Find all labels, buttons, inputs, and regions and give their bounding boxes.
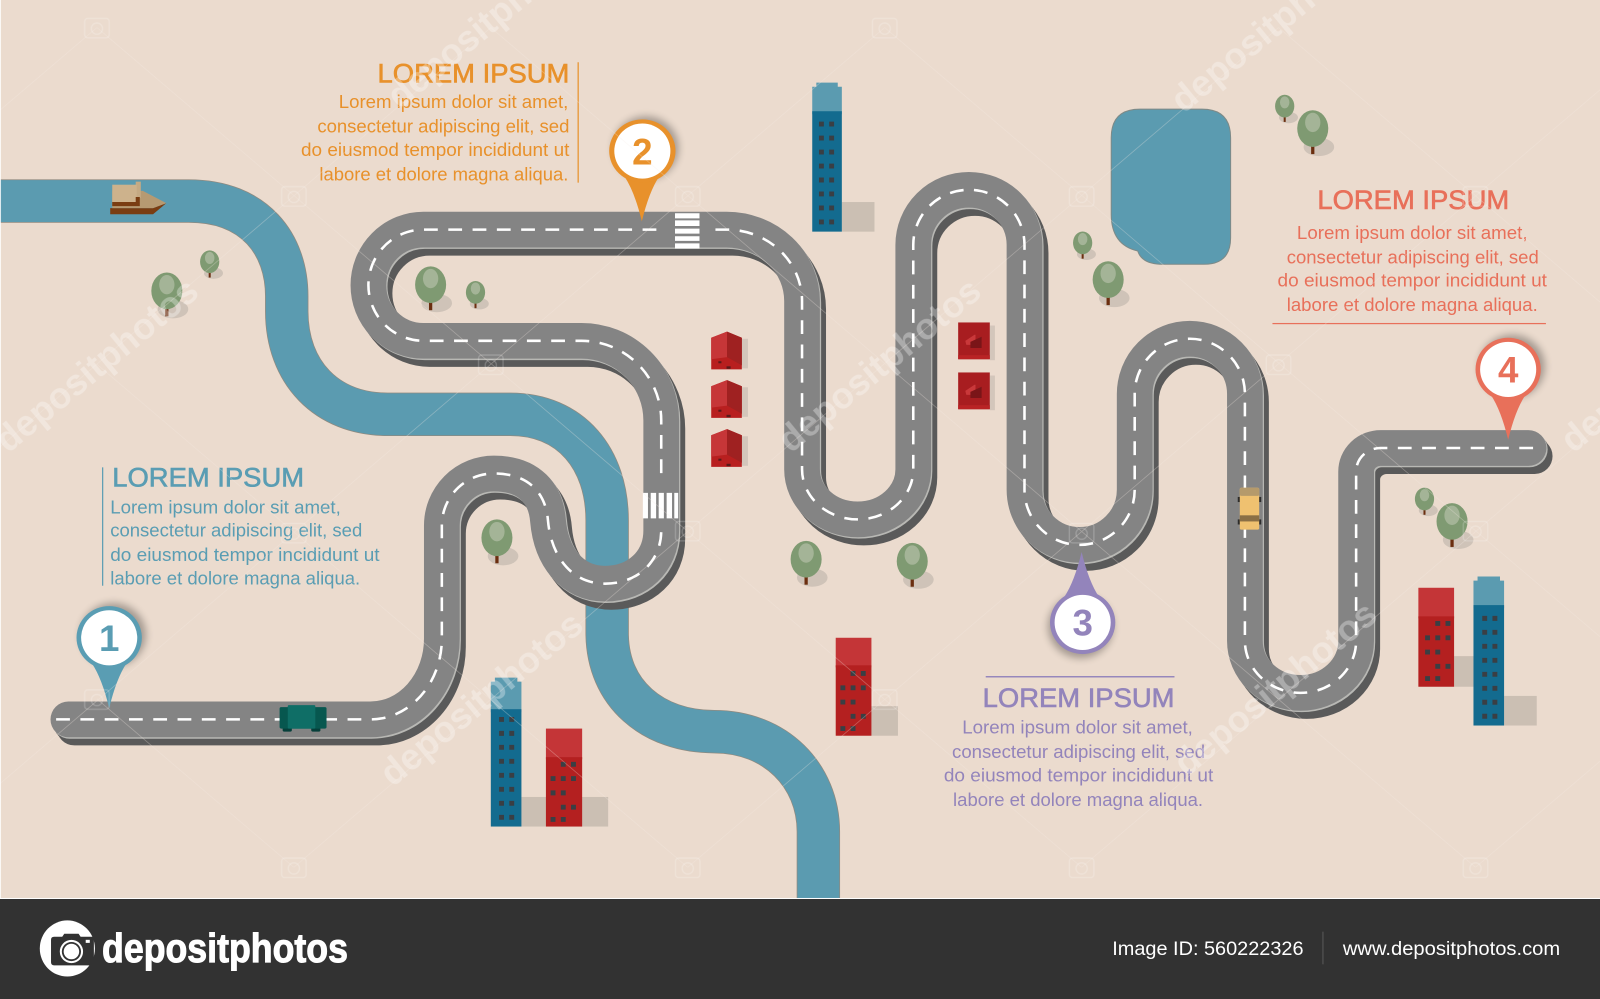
body 4 — [1278, 222, 1548, 315]
road — [56, 190, 1541, 728]
heading 4: LOREM IPSUM — [1317, 185, 1509, 215]
watermark overlay: depositphotos — [770, 270, 989, 460]
body 3 — [944, 717, 1214, 810]
pin 2 — [609, 116, 679, 221]
tree 10 — [1073, 231, 1096, 260]
body 4: labore et dolore magna aliqua. — [1287, 294, 1538, 315]
watermark overlay: depositphotos — [1166, 593, 1385, 784]
tree 11 — [1093, 261, 1130, 307]
tree 5 — [481, 519, 518, 565]
footer logo text: depositphotos — [102, 925, 348, 971]
footer logo icon — [40, 920, 95, 977]
pin 2: 2 — [632, 131, 653, 172]
body 4: consectetur adipiscing elit, sed — [1287, 246, 1539, 267]
flat house 2 — [958, 372, 995, 410]
tree 8 — [1275, 95, 1298, 123]
body 1: Lorem ipsum dolor sit amet, — [110, 496, 341, 517]
pin 1: 1 — [99, 618, 119, 659]
website url: www.depositphotos.com — [1342, 938, 1560, 960]
text block 4: coral — [1272, 185, 1548, 324]
body 2 — [301, 91, 570, 185]
tree 12 — [1415, 488, 1438, 516]
river — [0, 201, 818, 903]
towers: lower pair — [491, 678, 608, 827]
body 4: do eiusmod tempor incididunt ut — [1278, 270, 1548, 291]
text block 2: orange — [301, 59, 579, 185]
tree 9 — [1297, 110, 1334, 156]
body 2: labore et dolore magna aliqua. — [319, 164, 568, 185]
car: green — [280, 705, 327, 732]
house 1 — [711, 332, 748, 369]
pin 4 — [1476, 335, 1545, 440]
pin 4: 4 — [1498, 350, 1519, 391]
tree 4 — [466, 281, 489, 309]
tree 6 — [791, 541, 828, 587]
body 3: Lorem ipsum dolor sit amet, — [962, 717, 1193, 738]
body 1: labore et dolore magna aliqua. — [110, 568, 360, 589]
body 2: Lorem ipsum dolor sit amet, — [339, 91, 568, 112]
heading 1: LOREM IPSUM — [112, 463, 304, 493]
pin 1 — [77, 603, 146, 708]
tree 1 — [151, 272, 188, 318]
body 2: do eiusmod tempor incididunt ut — [301, 139, 570, 160]
car: yellow taxi — [1238, 488, 1261, 530]
houses: red row — [711, 332, 748, 467]
text block 3: purple — [944, 676, 1214, 810]
towers: right pair — [1418, 577, 1537, 726]
tree 13 — [1437, 503, 1473, 549]
crosswalk: lower road — [643, 480, 678, 529]
body 1 — [110, 496, 380, 589]
boat — [110, 182, 166, 214]
tower: red middle — [836, 638, 898, 736]
houses: flat pair — [958, 322, 995, 410]
left edge — [0, 0, 1, 898]
text block 1: teal — [102, 463, 380, 589]
watermark overlay: depositphotos — [372, 603, 591, 794]
body 3: labore et dolore magna aliqua. — [953, 789, 1203, 810]
house 3 — [711, 429, 748, 467]
road shadow — [71, 194, 1535, 728]
body 1: consectetur adipiscing elit, sed — [110, 520, 362, 541]
heading 2: LOREM IPSUM — [378, 59, 569, 89]
footer bar — [0, 898, 1600, 999]
tree 2 — [200, 250, 223, 279]
tree 3 — [415, 266, 452, 312]
flat house 1 — [958, 322, 995, 360]
heading 3: LOREM IPSUM — [983, 683, 1174, 713]
body 3: consectetur adipiscing elit, sed — [952, 741, 1205, 762]
body 2: consectetur adipiscing elit, sed — [317, 116, 569, 137]
body 1: do eiusmod tempor incididunt ut — [110, 544, 380, 565]
lake — [1111, 109, 1231, 264]
body 3: do eiusmod tempor incididunt ut — [944, 765, 1214, 786]
tree 7 — [897, 543, 934, 589]
house 2 — [711, 380, 748, 418]
image id: Image ID: 560222326 — [1112, 938, 1304, 960]
pin 3: 3 — [1072, 603, 1093, 644]
crosswalk: top road — [661, 213, 714, 248]
tower: blue top — [812, 83, 874, 232]
body 4: Lorem ipsum dolor sit amet, — [1297, 222, 1528, 243]
pin 3 — [1048, 552, 1115, 658]
trees — [151, 95, 1473, 589]
